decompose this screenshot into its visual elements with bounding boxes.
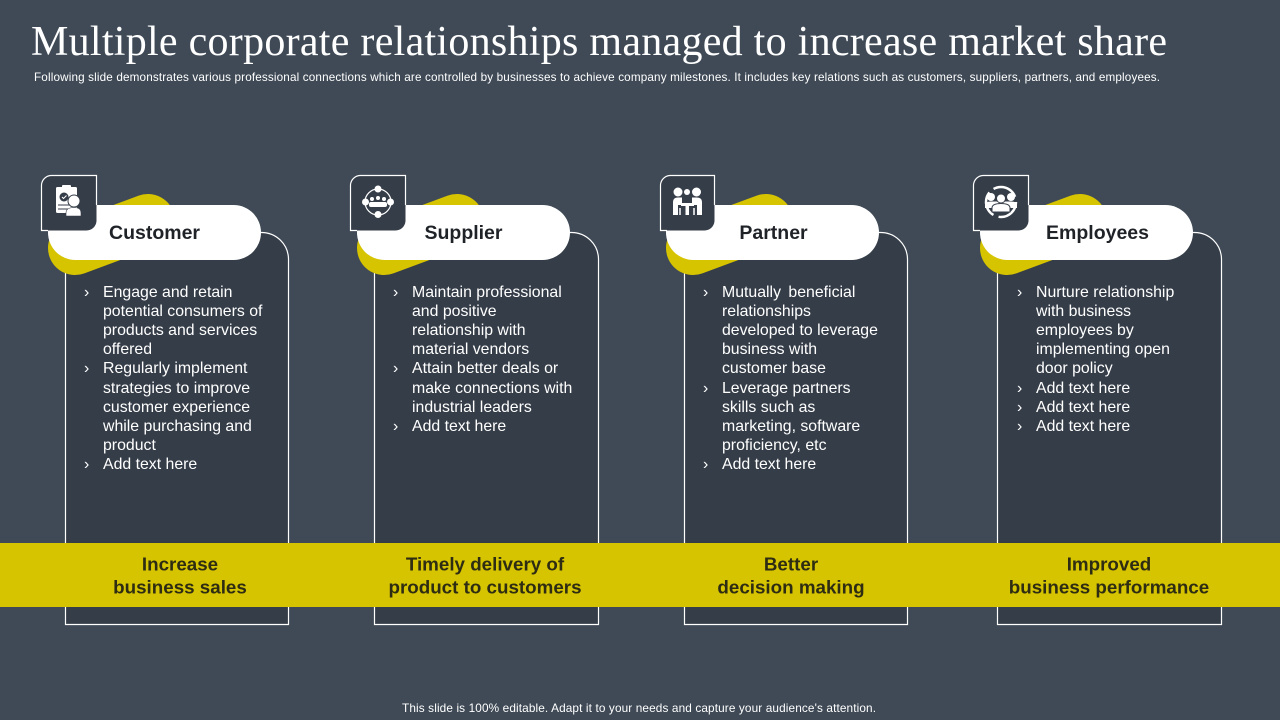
heading pill: employees: Employees bbox=[1046, 222, 1149, 244]
outcome: customer: business sales bbox=[113, 576, 247, 598]
bullet list: employees: › bbox=[1017, 380, 1022, 397]
bullet list: employees: Add text here bbox=[1036, 399, 1130, 416]
heading pill: partner bbox=[666, 205, 879, 260]
bullet list: partner: proficiency, etc bbox=[722, 437, 827, 454]
bullet list: customer: products and services bbox=[103, 322, 257, 339]
bullet list: partner: Add text here bbox=[722, 456, 816, 473]
bullet list: customer bbox=[84, 284, 263, 473]
bullet list: supplier: make connections with bbox=[412, 380, 572, 397]
bullet list: customer: customer experience bbox=[103, 399, 250, 416]
bullet list: partner: marketing, software bbox=[722, 418, 860, 435]
bullet list: customer: › bbox=[84, 360, 89, 377]
subtitle: Following slide demonstrates various professional connections which are controlled by businesses to achieve company milestones. It includes key relations such as customers, suppliers, partners, and employees. bbox=[34, 71, 1160, 84]
bullet list: supplier: › bbox=[393, 360, 398, 377]
bullet list: employees: implementing open bbox=[1036, 341, 1170, 358]
panel body: supplier bbox=[374, 232, 598, 624]
heading pill: customer: Customer bbox=[109, 222, 200, 244]
bullet list: employees bbox=[1017, 284, 1174, 435]
icon: team in circular arrows bbox=[974, 176, 1028, 230]
bullet list: partner: › bbox=[703, 284, 708, 301]
bullet list: employees: › bbox=[1017, 284, 1022, 301]
panel: partner bbox=[660, 176, 908, 624]
bullet list: customer: strategies to improve bbox=[103, 380, 250, 397]
heading pill: partner: Partner bbox=[739, 222, 808, 244]
bullet list: supplier: Add text here bbox=[412, 418, 506, 435]
outcome: partner: decision making bbox=[717, 576, 865, 598]
bullet list: customer: potential consumers of bbox=[103, 303, 263, 320]
outcome: partner: Better bbox=[764, 554, 819, 574]
bullet list: employees: Add text here bbox=[1036, 418, 1130, 435]
outcome: employees: business performance bbox=[1009, 576, 1209, 598]
footer note: This slide is 100% editable. Adapt it to your needs and capture your audience's attention. bbox=[402, 701, 876, 715]
bullet list: supplier: material vendors bbox=[412, 341, 529, 358]
outcome: supplier: product to customers bbox=[388, 576, 582, 598]
title: Multiple corporate relationships managed to increase market share bbox=[31, 19, 1167, 65]
panel body: employees bbox=[998, 232, 1222, 624]
bullet list: supplier: Attain better deals or bbox=[412, 360, 559, 377]
bullet list: customer: product bbox=[103, 437, 156, 454]
heading pill: supplier bbox=[357, 205, 570, 260]
yellow blob: supplier bbox=[384, 221, 457, 248]
icon: clipboard and person bbox=[42, 176, 96, 231]
heading pill: employees bbox=[980, 205, 1193, 260]
bullet list: customer: › bbox=[84, 284, 89, 301]
bullet list: partner: customer base bbox=[722, 360, 826, 377]
bullet list: supplier: relationship with bbox=[412, 322, 526, 339]
bullet list: partner: skills such as bbox=[722, 399, 815, 416]
bullet list: partner: Leverage partners bbox=[722, 380, 851, 397]
panel body: partner bbox=[684, 232, 908, 624]
bullet list: partner: Mutually beneficial bbox=[722, 284, 855, 301]
outcome: supplier: Timely delivery of bbox=[406, 554, 565, 574]
yellow blob: employees bbox=[1007, 221, 1080, 248]
bullet list: employees: › bbox=[1017, 399, 1022, 416]
bullet list: partner bbox=[703, 284, 878, 473]
bullet list: supplier: › bbox=[393, 418, 398, 435]
bullet list: employees: door policy bbox=[1036, 360, 1113, 377]
bullet list: partner: business with bbox=[722, 341, 817, 358]
icon: network of people bbox=[350, 176, 406, 230]
bullet list: partner: › bbox=[703, 456, 708, 473]
bullet list: employees: › bbox=[1017, 418, 1022, 435]
panel body: customer bbox=[66, 232, 288, 624]
bullet list: employees: Add text here bbox=[1036, 380, 1130, 397]
panel: employees bbox=[974, 176, 1222, 624]
bullet list: supplier: Maintain professional bbox=[412, 284, 562, 301]
yellow outcome band bbox=[0, 543, 1280, 607]
bullet list: employees: Nurture relationship bbox=[1036, 284, 1174, 301]
bullet list: customer: Engage and retain bbox=[103, 284, 232, 301]
bullet list: customer: Add text here bbox=[103, 456, 197, 473]
outcome: employees: Improved bbox=[1067, 554, 1151, 574]
yellow blob: customer bbox=[75, 221, 148, 248]
icon: meeting at table bbox=[660, 176, 714, 230]
bullet list: customer: Regularly implement bbox=[103, 360, 248, 377]
bullet list: partner: › bbox=[703, 380, 708, 397]
panel: supplier bbox=[350, 176, 598, 624]
panel: customer bbox=[42, 176, 288, 624]
bullet list: customer: › bbox=[84, 456, 89, 473]
outcome: customer: Increase bbox=[142, 554, 218, 574]
bullet list: customer: offered bbox=[103, 341, 152, 358]
heading pill: supplier: Supplier bbox=[424, 222, 503, 244]
bullet list: partner: relationships bbox=[722, 303, 811, 320]
bullet list: partner: developed to leverage bbox=[722, 322, 878, 339]
bullet list: employees: employees by bbox=[1036, 322, 1134, 339]
bullet list: supplier: industrial leaders bbox=[412, 399, 532, 416]
bullet list: supplier bbox=[393, 284, 572, 435]
yellow blob: partner bbox=[693, 221, 766, 248]
bullet list: customer: while purchasing and bbox=[102, 418, 252, 435]
bullet list: supplier: and positive bbox=[412, 303, 497, 320]
bullet list: supplier: › bbox=[393, 284, 398, 301]
heading pill: customer bbox=[48, 205, 261, 260]
bullet list: employees: with business bbox=[1035, 303, 1131, 320]
